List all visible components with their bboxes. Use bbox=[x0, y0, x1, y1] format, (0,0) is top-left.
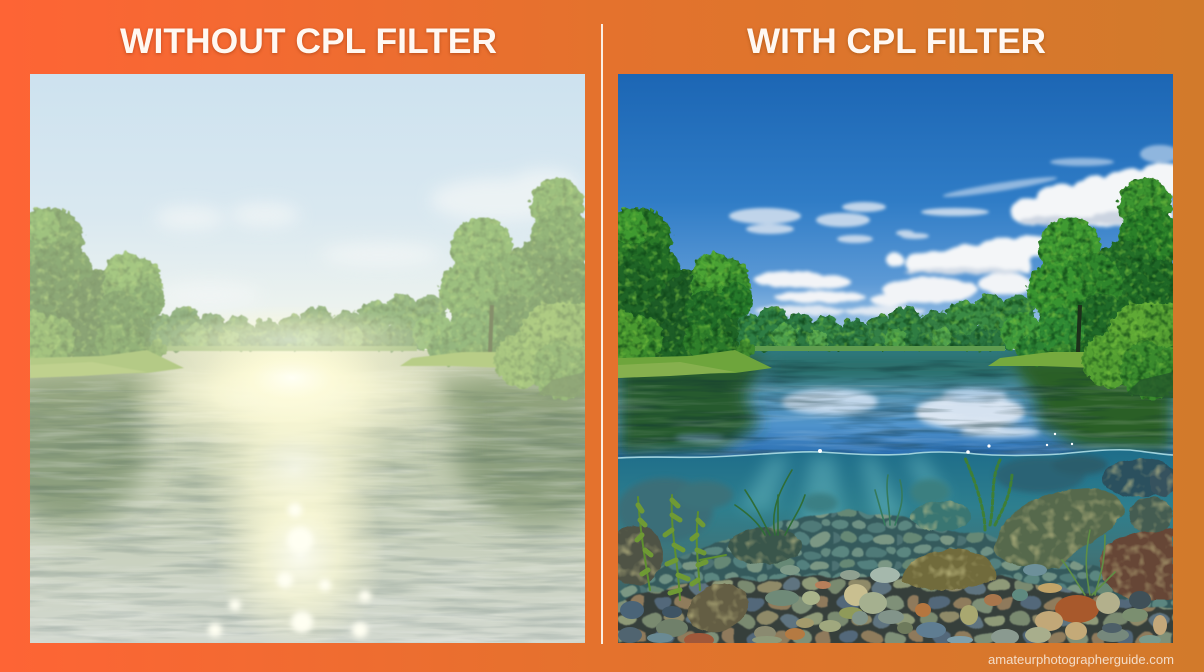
ripples bbox=[618, 360, 1173, 456]
light rays bbox=[742, 451, 942, 518]
individual pebbles bbox=[618, 564, 1167, 647]
bright water bbox=[30, 350, 585, 643]
surface line bbox=[618, 450, 1173, 458]
faint clouds bbox=[160, 167, 578, 262]
sky reflections bbox=[675, 388, 1040, 441]
washed trees and banks bbox=[9, 178, 599, 400]
panel: with CPL filter scene bbox=[597, 74, 1187, 650]
side reflections bbox=[0, 368, 625, 525]
sparkles on surface bbox=[818, 433, 1073, 454]
pebble bed small bbox=[618, 510, 1173, 610]
panel: without CPL filter scene bbox=[30, 74, 585, 643]
haze bbox=[158, 309, 423, 353]
reflective lake bbox=[618, 350, 1173, 458]
title: without filter: WITHOUT CPL FILTER bbox=[120, 22, 497, 61]
tree reflections bbox=[618, 352, 1173, 455]
title: with filter: WITH CPL FILTER bbox=[747, 22, 1046, 61]
centre divider bbox=[601, 24, 603, 644]
trees and banks bbox=[597, 178, 1187, 400]
deep blue sky bbox=[618, 74, 1173, 354]
dim background boulders bbox=[617, 455, 1108, 542]
wispy clouds bbox=[729, 145, 1180, 243]
sun glare bbox=[134, 351, 443, 636]
pebble bed large bbox=[618, 575, 1173, 650]
sparkles bbox=[208, 503, 371, 638]
cumulus clouds bbox=[753, 162, 1186, 316]
washed sky bbox=[30, 74, 585, 354]
watermark: amateurphotographerguide.com bbox=[988, 653, 1174, 667]
water ripples bbox=[30, 370, 585, 643]
aquatic plants bbox=[637, 458, 1115, 600]
large rocks bbox=[607, 459, 1178, 640]
underwater bbox=[607, 450, 1178, 650]
